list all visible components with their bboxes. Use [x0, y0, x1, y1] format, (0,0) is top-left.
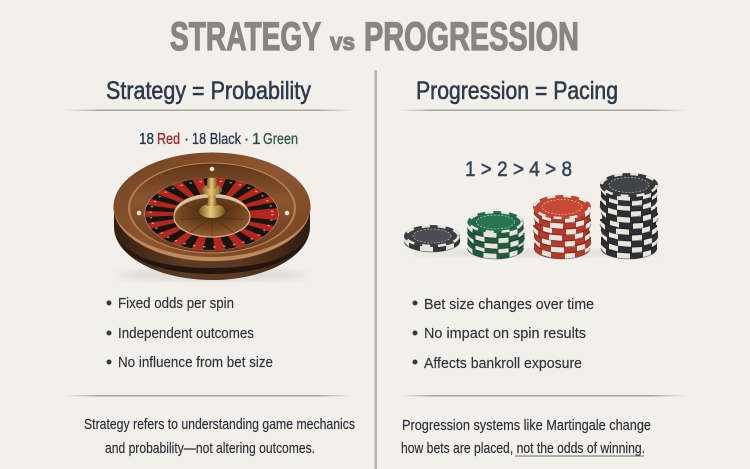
chip stack: 8 black — [600, 173, 658, 259]
progression sequence: 1 > 2 > 4 > 8 — [465, 158, 572, 181]
marker dots — [137, 167, 289, 215]
pocket count legend: · — [184, 131, 189, 148]
heading: strategy: Strategy = Probability — [106, 77, 311, 105]
summary: progression: how bets are placed, not the odds of winning. — [401, 441, 645, 457]
title: PROGRESSION — [364, 15, 579, 59]
bullet list: progression: Bet size changes over time — [424, 296, 594, 313]
bullet list: progression — [412, 296, 594, 372]
bullet list: progression: Affects bankroll exposure — [424, 355, 582, 372]
number ring — [144, 178, 278, 250]
bullet list: strategy — [106, 295, 273, 371]
summary: strategy: and probability—not altering outcomes. — [105, 441, 315, 457]
panel: strategy — [65, 77, 355, 457]
wheel cone — [174, 197, 250, 237]
pocket count legend: · — [244, 131, 249, 148]
bullet list: strategy: Independent outcomes — [118, 325, 254, 342]
title — [170, 15, 579, 59]
title: STRATEGY — [170, 15, 321, 59]
title: vs — [330, 29, 355, 56]
summary: strategy: Strategy refers to understanding game mechanics — [84, 417, 355, 433]
pocket count legend: 18 — [139, 131, 154, 148]
panel: progression — [398, 77, 686, 457]
chip stacks — [404, 173, 660, 259]
pocket count legend: 18 Black — [192, 131, 241, 148]
chip stack: 4 red — [533, 195, 591, 259]
pocket count legend: 1 — [252, 131, 261, 148]
wheel turret — [199, 178, 225, 218]
pocket count legend: Green — [263, 131, 298, 148]
pocket count legend — [139, 131, 298, 148]
heading: progression: Progression = Pacing — [416, 77, 618, 105]
roulette wheel — [114, 152, 310, 281]
bullet list: strategy: No influence from bet size — [118, 354, 273, 371]
pocket count legend: Red — [157, 131, 180, 148]
summary: progression — [401, 418, 651, 457]
bullet list: strategy: Fixed odds per spin — [118, 295, 234, 312]
bullet list: progression: No impact on spin results — [424, 325, 586, 342]
chip stack: 2 green — [468, 211, 524, 259]
summary: strategy — [84, 417, 355, 457]
chip stack: 1 black — [404, 225, 460, 252]
summary: progression: Progression systems like Martingale change — [402, 418, 651, 434]
